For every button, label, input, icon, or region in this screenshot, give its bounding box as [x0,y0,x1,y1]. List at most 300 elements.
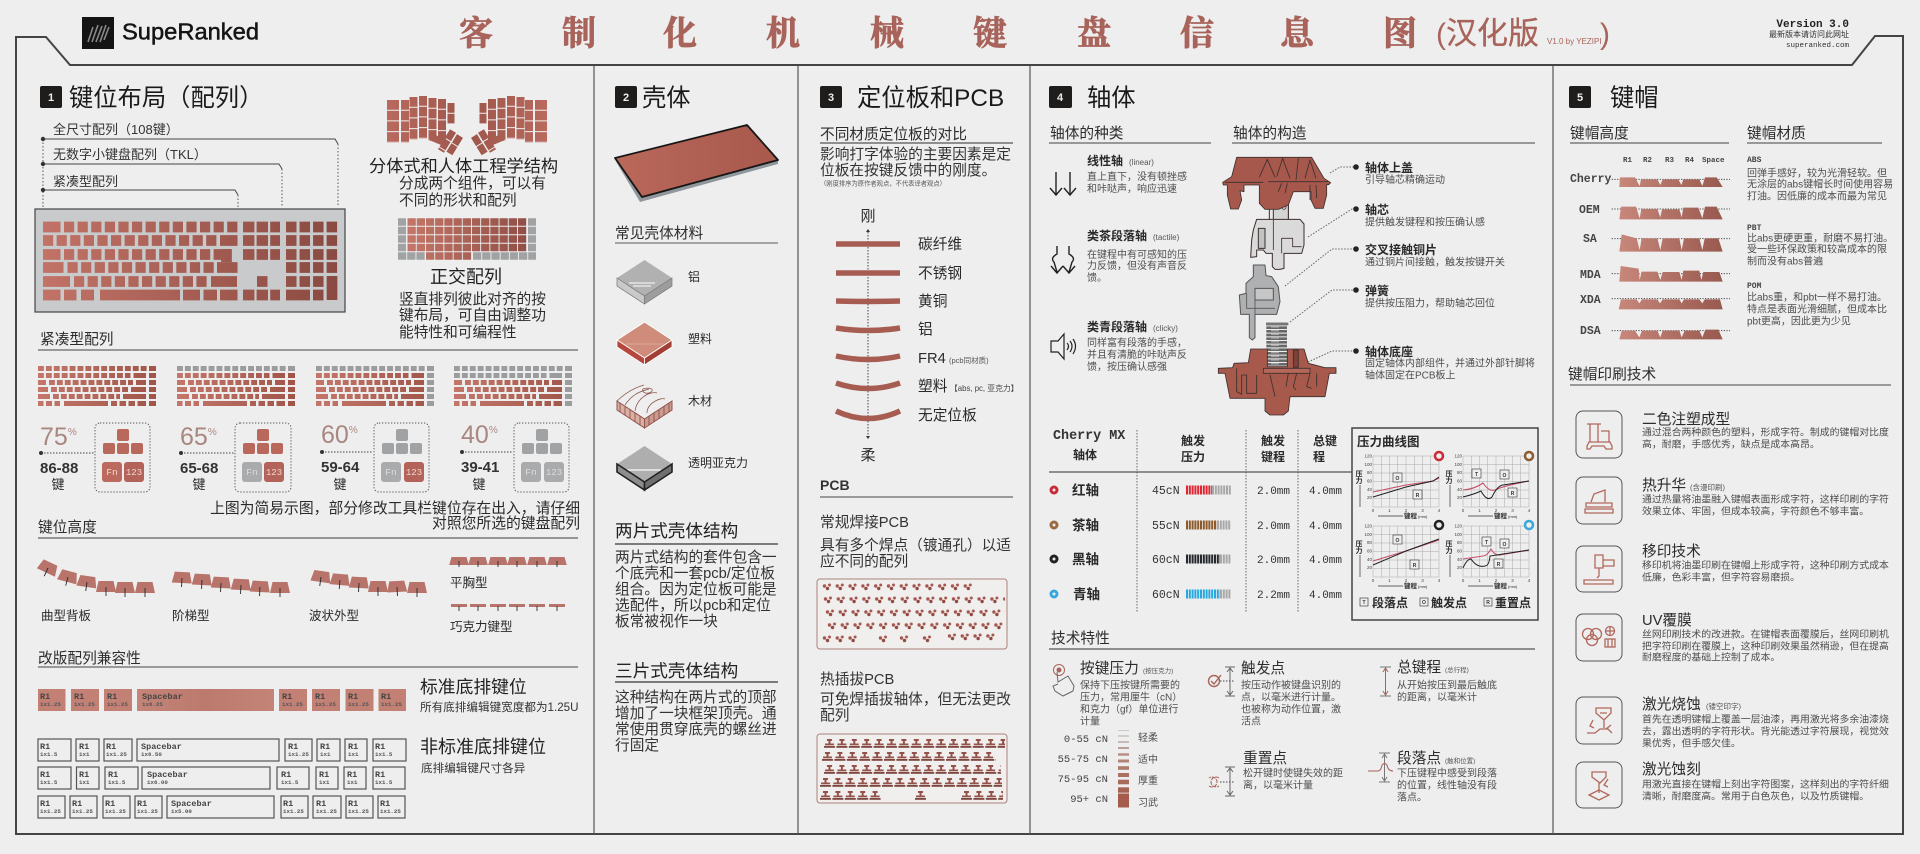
plate stiffness chart: 刚 [860,208,876,225]
row blue: 60cN [1152,589,1180,602]
split keyboard text: 分成两个组件，可以有 [399,175,546,192]
keycap profile names: DSA [1580,325,1601,338]
print laser etch: 激光烧蚀 [1642,696,1701,713]
chart blue: 120 [1454,524,1462,528]
chart red: 1 [1388,508,1391,513]
size 75: Fn [106,467,118,478]
size 60: 59-64 [321,459,360,476]
heading 2: 2 [623,92,629,104]
force scale: 轻柔 [1138,731,1158,744]
profile wave [309,570,427,623]
row blue: 4.0mm [1309,590,1342,602]
non standard bottom rows: 1x1 [348,751,359,758]
header [82,15,1849,53]
keycap profile shapes [1612,177,1730,339]
two piece: 两片式结构的套件包含一 [615,549,777,566]
row red: 4.0mm [1309,486,1342,498]
chart brown: 0 [1462,508,1465,513]
chart blue: 4 [1528,578,1531,583]
material ABS: 回弹手感好，较为光滑轻软。但 [1747,166,1887,180]
chart brown: 120 [1454,454,1462,458]
print pad printing: 低廉，色彩丰富，但字符容易磨损。 [1642,570,1800,584]
print UV: 丝网印刷技术的改进款。在键帽表面覆膜后，丝网印刷机 [1642,628,1889,640]
split keyboard text: 分体式和人体工程学结构 [369,156,558,176]
chart red [1356,452,1443,520]
non standard bottom rows: 1x1.25 [380,808,401,815]
heading 5 [1569,85,1659,112]
callouts: 通过铜片间接触，触发按键开关 [1365,256,1505,268]
row black: 60cN [1152,554,1180,567]
split keyboard [393,96,541,154]
chart brown: 4 [1528,508,1531,513]
non standard bottom rows: R1 [108,770,118,780]
subheading material: 键帽材质 [1747,125,1806,142]
type tactile: 力反馈，但没有声音反 [1087,259,1187,272]
tech force: 压力，常用厘牛（cN） [1080,690,1182,704]
tech actuation: 活点 [1241,716,1261,728]
chart blue: T [1485,540,1488,546]
material PBT: 制而没有abs普遍 [1747,254,1823,268]
heading 1: 键位布局（配列） [69,85,263,112]
panel: keyboard layouts [35,85,580,818]
two piece: 组合。因为定位板可能是 [615,580,777,598]
plate stiffness chart: 柔 [860,447,876,464]
chart red: 力 [1356,476,1362,485]
type tactile: 馈。 [1087,271,1107,284]
standard bottom row: 1x1.25 [381,701,402,708]
non standard bottom rows: Spacebar [171,799,212,809]
non standard bottom rows: 1x6.00 [147,779,168,786]
material POM: 比abs重，和pbt一样不易打油。 [1747,290,1887,304]
heading 1: 1 [48,92,54,104]
non standard bottom rows: R1 [348,742,358,752]
force curve charts: 压力曲线图 [1357,434,1420,449]
chart brown [1446,452,1533,520]
print dye sublimation [1642,477,1889,518]
tech tactile point [1397,750,1497,804]
chart black: 4 [1438,578,1441,583]
mini keyboard 40 [454,368,572,404]
size 40: Fn [525,467,537,478]
non standard bottom rows: R1 [319,770,329,780]
print UV: UV覆膜 [1642,612,1692,629]
material ABS: 打油。因低廉的成本而最为常见 [1747,190,1887,202]
non standard bottom rows: 1x5.00 [171,808,192,815]
type linear [1087,153,1187,195]
layout size brackets [41,122,338,207]
non standard bottom rows: 1x1.25 [105,808,126,815]
tech reset: 松开键时使键失效的距 [1243,766,1343,780]
icon: speaker [1051,334,1076,359]
title: 息 [1280,15,1316,53]
split keyboard text: 不同的形状和配列 [399,192,517,209]
plate stiffness chart: FR4 [918,351,946,367]
tech tactile point: (触和位置) [1445,756,1475,765]
plate stiffness chart: 【abs, pc, 亚克力】 [950,383,1018,393]
non standard bottom rows: R1 [288,742,298,752]
force scale: 55-75 cN [1058,754,1108,766]
tech tactile point: 下压键程中感受到段落 [1397,766,1497,780]
non standard bottom rows: R1 [380,799,390,809]
non standard bottom rows: 1x1.25 [348,808,369,815]
profile curved [35,558,155,623]
callouts: 提供按压阻力，帮助轴芯回位 [1365,296,1495,310]
switch table: Cherry MX [1053,429,1126,444]
chart blue [1446,521,1533,590]
exploded switch [1218,157,1336,415]
type clicky: 同样富有段落的手感， [1087,336,1187,349]
switch table: 触发 [1181,433,1205,448]
size 75: % [68,427,77,438]
standard bottom row: R1 [282,692,292,702]
standard bottom row: Spacebar [142,692,183,702]
chart red: 键程 [1404,511,1418,520]
size 75: 86-88 [40,460,78,477]
title: 信 [1180,15,1214,53]
type linear: 直上直下，没有顿挫感 [1087,170,1187,183]
non standard bottom rows: 1x1.25 [106,751,127,758]
print dye sublimation: 通过热量将油墨融入键帽表面形成字符，这样印刷的字符 [1642,492,1889,506]
tech reset [1243,750,1343,792]
standard bottom row [38,689,406,711]
row black: 黑轴 [1072,551,1099,567]
chart black [1356,521,1443,590]
three piece: 三片式壳体结构 [615,661,738,681]
subheading material [1747,125,1882,143]
title: 客 [459,15,493,53]
panel: keycaps [1568,85,1893,808]
print laser etch: (镂空印字) [1706,701,1741,711]
layout size brackets: 全尺寸配列（108键） [53,122,179,137]
size 60: 60 [321,421,349,449]
layout size brackets: 无数字小键盘配列（TKL） [53,147,207,162]
tech actuation: 点，以毫米进行计量。 [1241,690,1341,704]
tech actuation: 也被称为动作位置，激 [1241,702,1341,716]
callouts: 引导轴芯精确运动 [1365,173,1445,186]
chart red: O [1396,476,1400,482]
non standard bottom rows: R1 [40,742,50,752]
icon: wood [617,383,672,428]
label plastic: 塑料 [688,331,712,346]
heading 3: 定位板和PCB [857,85,1004,112]
chart brown: R [1511,491,1515,497]
row black [1051,551,1342,567]
subheading tech: 技术特性 [1051,630,1110,647]
three piece [615,661,778,754]
non standard bottom rows: R1 [316,799,326,809]
switch table: 触发 [1261,433,1285,448]
non standard bottom rows: R1 [79,742,89,752]
tech actuation: 按压动作被键盘识别的 [1241,678,1341,692]
chart blue: 1 [1478,578,1481,583]
chart red: (mm) [1418,514,1428,519]
print laser engrave [1642,761,1889,802]
material POM: pbt更高，因此更为少见 [1747,314,1851,328]
size 65: % [208,427,217,438]
profile wave: 波状外型 [309,609,359,623]
size 40: 123 [546,468,562,478]
panel: plate and PCB [817,85,1018,803]
subheading height: 键位高度 [38,519,97,536]
force scale: 0-55 cN [1064,734,1108,746]
standard bottom row: R1 [40,692,50,702]
callouts: 弹簧 [1365,283,1389,298]
heading 4: 轴体 [1087,85,1136,112]
force scale: 厚重 [1138,774,1158,787]
ortholinear text: 键布局，可自由调整功 [399,307,546,324]
chart blue: 2 [1495,578,1498,583]
icon: aluminum [617,260,672,304]
keycap row labels: R4 [1685,157,1695,165]
force scale: 75-95 cN [1058,774,1108,786]
chart blue: 40 [1457,557,1462,562]
switch table: 键程 [1261,449,1285,464]
chart black: 2 [1405,578,1408,583]
soldered PCB text: 具有多个焊点（镀通孔）以适 [820,537,1011,554]
switch bottom housing [1218,349,1336,415]
standard bottom row label: 所有底排编辑键宽度都为1.25U [420,700,578,714]
chart brown: 80 [1457,470,1462,475]
row brown: 4.0mm [1309,521,1342,533]
non standard bottom rows: 1x1.25 [40,808,61,815]
tech tactile point: 段落点 [1397,750,1441,767]
type linear: 线性轴 [1087,153,1123,168]
chart blue: 0 [1462,578,1465,583]
keycap row labels: Space [1702,157,1725,165]
hotswap PCB text: 可免焊插拔轴体，但无法更改 [820,691,1011,708]
chart black: (mm) [1418,584,1428,589]
non standard bottom rows: 1x1.25 [316,808,337,815]
full size keyboard [35,209,345,312]
profile choc: 巧克力键型 [450,620,513,634]
soldered PCB board [817,579,1007,649]
print pad printing [1642,543,1889,584]
non standard bottom rows: 1x1 [79,751,90,758]
hotswap PCB text: 配列 [820,707,849,724]
size 65: 65-68 [180,460,218,477]
standard bottom row: R1 [348,692,358,702]
non standard bottom rows: Spacebar [147,770,188,780]
non standard bottom rows: 1x1.5 [375,779,393,786]
callouts: 固定轴体内部组件，并通过外部针脚将 [1365,356,1535,370]
chart red: 120 [1364,454,1372,458]
row brown: 2.0mm [1257,521,1290,533]
non standard bottom rows: 1x1 [79,779,90,786]
tech force: (按压克力) [1143,666,1173,675]
print laser etch [1642,696,1889,750]
tech reset: 重置点 [1243,750,1287,767]
row red: 45cN [1152,485,1180,498]
tech actuation [1241,660,1341,728]
print UV: 耐磨程度的基础上控制了成本。 [1642,650,1780,664]
size 75 [39,423,150,492]
non standard bottom rows: R1 [137,799,147,809]
tech reset: 离，以毫米计量 [1243,778,1313,792]
material PBT [1747,224,1893,268]
profile stepped: 阶梯型 [172,609,210,623]
row brown [1051,517,1342,533]
switch table: 轴体 [1073,447,1097,462]
callouts: 轴芯 [1365,202,1389,217]
plate stiffness chart: 塑料 [918,378,948,395]
type tactile: 在键程中有可感知的压 [1087,248,1187,261]
non standard bottom rows: 1x1.5 [281,779,299,786]
non standard bottom rows: R1 [281,770,291,780]
non standard bottom rows: R1 [375,770,385,780]
plate stiffness chart: 不锈钢 [918,265,962,282]
size 60: % [349,425,358,436]
size 60: 键 [333,477,347,492]
profile flat: 平胸型 [450,575,488,590]
standard bottom row: 1x1.25 [74,701,95,708]
switch table: 程 [1313,450,1325,464]
version info: 最新版本请访问此网址 [1769,29,1849,39]
callouts: 轴体固定在PCB板上 [1365,368,1456,382]
icon: UV coating [1576,614,1622,661]
title: V1.0 by YEZIPI [1547,37,1602,46]
standard bottom row: R1 [381,692,391,702]
standard bottom row label: 标准底排键位 [420,677,527,697]
chart red: 压 [1356,470,1362,478]
standard bottom row: 1x1.25 [348,701,369,708]
non standard bottom rows: 1x1.5 [108,779,126,786]
row brown: 茶轴 [1072,517,1099,533]
row blue: 青轴 [1073,586,1100,602]
plate intro: 不同材质定位板的对比 [820,125,967,143]
ortholinear text: 竖直排列彼此对齐的按 [399,291,546,308]
layout note: 上图为简易示图，部分修改工具栏键位存在出入，请仔细 [210,500,580,517]
chart blue: O [1503,542,1507,548]
non standard bottom rows: R1 [347,770,357,780]
non standard bottom rows: 1x1.5 [40,779,58,786]
print laser engrave: 激光蚀刻 [1642,761,1701,778]
plate stiffness chart: (pcb同材质) [949,355,989,365]
plate intro: （刚度排序为原作者观点，不代表译者观点） [820,178,946,188]
ortholinear text [399,267,546,341]
chart red: 2 [1405,508,1408,513]
chart red: 20 [1367,495,1372,500]
material POM [1747,282,1887,328]
mini keyboard 60 [316,368,434,404]
non standard bottom rows: 1x1.25 [72,808,93,815]
subheading printing: 键帽印刷技术 [1568,366,1656,383]
non standard bottom rows: R1 [40,770,50,780]
chart red: 40 [1367,487,1372,492]
subheading compatibility: 改版配列兼容性 [38,650,141,667]
logo: SupeRanked [122,18,259,44]
label aluminum: 铝 [688,269,700,284]
non standard bottom rows: 1x1 [320,751,331,758]
print laser engrave: 清晰，耐磨度高。常用于白色灰色，以及竹质键帽。 [1642,790,1869,802]
title: 图 [1383,15,1417,53]
hotswap PCB board [817,734,1007,803]
chart red: 80 [1367,470,1372,475]
non standard bottom rows: 1x1.5 [40,751,58,758]
switch spring [1266,323,1288,367]
tech tactile point: 落点。 [1397,792,1427,804]
split keyboard text [369,156,558,209]
standard bottom row: R1 [107,692,117,702]
heading 4 [1049,85,1136,112]
subheading PCB: PCB [820,477,850,493]
material ABS: 无涂层的abs键帽长时间使用容易 [1747,178,1893,190]
keycap profile names: XDA [1580,294,1601,307]
soldered PCB text: 应不同的配列 [820,552,908,570]
chart black: 键程 [1404,581,1418,590]
title: ) [1600,18,1610,51]
non standard bottom rows: 1x6.50 [141,751,162,758]
chart brown: 2 [1495,508,1498,513]
heading 3: 3 [828,92,834,104]
print doubleshot [1642,411,1889,450]
standard bottom row: 1x1.25 [107,701,128,708]
icon: laser engraving [1576,762,1622,808]
chart blue: 60 [1457,548,1462,554]
tech force: 计量 [1080,714,1100,728]
panel: case [615,85,778,754]
standard bottom row: 1x1.25 [40,701,61,708]
chart brown: O [1503,473,1507,479]
case tray [615,125,778,202]
label wood: 木材 [688,394,712,408]
print doubleshot: 二色注塑成型 [1642,411,1730,428]
plate stiffness chart [836,208,1018,464]
chart red: R [1416,493,1420,499]
chart legend: 触发点 [1431,595,1467,610]
chart black: 100 [1364,532,1372,537]
chart blue: 80 [1457,540,1462,545]
tech force [1080,660,1182,728]
title: 械 [870,15,904,53]
tech force: 和克力（gf）单位进行 [1080,702,1178,716]
non standard bottom rows: R1 [320,742,330,752]
keycap profile names: OEM [1579,204,1600,217]
chart red: 0 [1372,508,1375,513]
title: 化 [663,15,697,53]
soldered PCB text [820,514,1011,570]
row black: 4.0mm [1309,555,1342,567]
switch table [1049,429,1352,612]
standard bottom row: 1x6.25 [142,701,163,708]
tech actuation: 触发点 [1241,660,1285,677]
size 60: Fn [385,467,397,478]
plate stiffness chart: 碳纤维 [918,236,962,253]
icon: pad printing [1576,546,1622,592]
callouts: 提供触发键程和按压确认感 [1365,216,1485,228]
heading 2: 壳体 [642,85,691,112]
print laser etch: 果优秀，但手感欠佳。 [1642,736,1741,750]
label acrylic: 透明亚克力 [688,456,748,470]
row black: 2.0mm [1257,555,1290,567]
size 65: 键 [192,477,206,492]
icon: tactile arrows [1051,246,1075,273]
type clicky [1087,319,1187,373]
force scale: 习武 [1138,796,1158,809]
chart brown: 40 [1457,487,1462,492]
callouts: 交叉接触铜片 [1365,242,1437,257]
non standard bottom rows: R1 [375,742,385,752]
chart black: 80 [1367,540,1372,545]
keycap row labels: R1 [1623,157,1633,165]
two piece [615,521,778,630]
size 40: % [489,425,498,436]
size 75: 75 [40,423,68,451]
three piece: 增加了一块框架顶壳。通 [615,705,777,722]
chart brown: T [1475,472,1478,478]
switch top housing [1223,157,1331,209]
tech total travel: 总键程 [1397,659,1441,676]
size 40: 39-41 [461,459,499,476]
